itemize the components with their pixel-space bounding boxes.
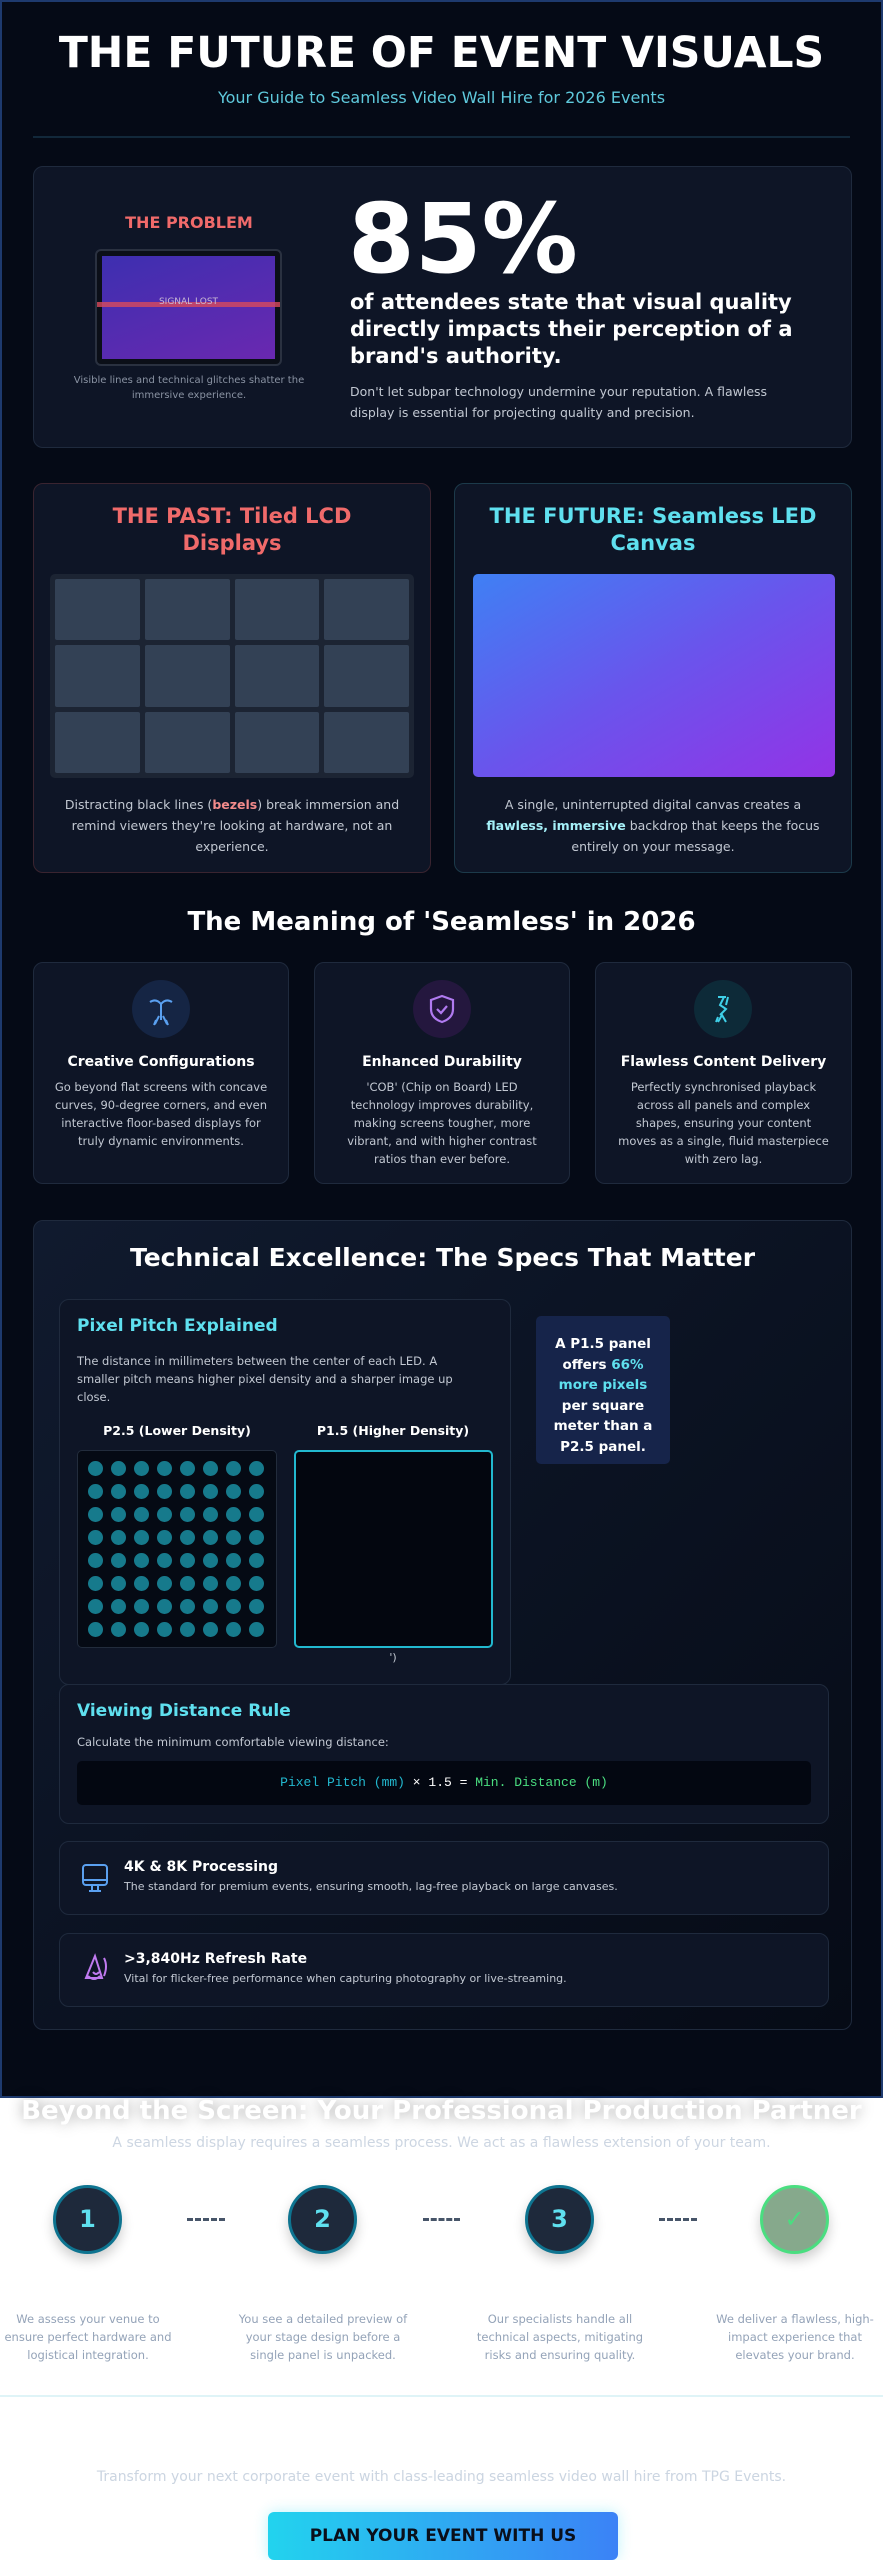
p2.5 label: P2.5 (Lower Density) xyxy=(103,1423,251,1438)
CTA button: PLAN YOUR EVENT WITH US xyxy=(310,2526,576,2546)
callout: 66%: A P1.5 panel offers 66% more pixels per square meter than a P2.5 panel. xyxy=(554,1336,652,1454)
panel: problem xyxy=(33,166,852,448)
text: 'COB' (Chip on Board) LED technology improves durability, making screens tougher, more vibrant, and with higher contrast ratios than ever before. xyxy=(347,1080,537,1166)
icon: glitched screen xyxy=(95,249,282,366)
panel: past xyxy=(33,483,431,873)
process steps: You see a detailed preview of your stage design before a single panel is unpacked. xyxy=(239,2312,407,2362)
step 3 xyxy=(525,2185,594,2254)
process steps: Our specialists handle all technical aspects, mitigating risks and ensuring quality. xyxy=(477,2312,643,2362)
heading: Pixel Pitch Explained xyxy=(77,1316,278,1336)
seamless canvas xyxy=(473,574,835,777)
p1.5 label: P1.5 (Higher Density) xyxy=(317,1423,469,1438)
subpanel: pixel pitch xyxy=(59,1299,511,1685)
step 1 xyxy=(53,2185,122,2254)
past caption: Distracting black lines (bezels) break immersion and remind viewers they're looking at hardware, not an experience. xyxy=(65,797,399,854)
formula: Pixel Pitch (mm) × 1.5 = Min. Distance (m) xyxy=(280,1775,608,1790)
future heading: THE FUTURE: Seamless LED xyxy=(490,504,816,528)
p2.5 grid xyxy=(77,1450,277,1648)
spec text: 4K & 8K Processing xyxy=(124,1859,278,1875)
text: Calculate the minimum comfortable viewing distance: xyxy=(77,1735,389,1749)
problem caption: Visible lines and technical glitches shatter the immersive experience. xyxy=(74,375,304,401)
heading: Viewing Distance Rule xyxy=(77,1701,291,1721)
icon: monitor xyxy=(82,1864,108,1892)
heading: Flawless Content Delivery xyxy=(621,1054,826,1070)
tiled LCD grid xyxy=(50,574,414,778)
meaning heading: The Meaning of 'Seamless' in 2026 xyxy=(187,907,696,937)
heading: Creative Configurations xyxy=(67,1054,255,1070)
callout: 66% xyxy=(536,1316,670,1464)
icon: shield xyxy=(413,980,471,1038)
future caption: A single, uninterrupted digital canvas creates a flawless, immersive backdrop that keeps the focus entirely on your message. xyxy=(486,797,820,854)
panel: content delivery xyxy=(595,962,852,1184)
spec: 4K 8K: The standard for premium events, ensuring smooth, lag-free playback on large canvases. xyxy=(124,1880,618,1893)
text: Perfectly synchronised playback across all panels and complex shapes, ensuring your content moves as a single, fluid masterpiece with zero lag. xyxy=(618,1080,829,1166)
panel: technical excellence xyxy=(33,1220,852,2030)
spec: refresh rate: Vital for flicker-free performance when capturing photography or live-streaming. xyxy=(124,1972,567,1985)
partner heading: Beyond the Screen: Your Professional Production Partner xyxy=(21,2096,862,2126)
title: THE FUTURE OF EVENT VISUALS xyxy=(59,29,824,78)
past heading: Displays xyxy=(182,531,282,555)
formula xyxy=(77,1761,811,1805)
problem heading: THE PROBLEM xyxy=(125,213,253,232)
future heading xyxy=(490,504,816,555)
spec: 4K 8K xyxy=(59,1841,829,1915)
tech heading: Technical Excellence: The Specs That Matter xyxy=(130,1243,755,1272)
step 1: 1 xyxy=(79,2205,96,2233)
past heading: THE PAST: Tiled LCD xyxy=(113,504,351,528)
step 2 xyxy=(288,2185,357,2254)
step 3: 3 xyxy=(551,2205,568,2233)
stat 85%: 85% xyxy=(348,183,578,295)
step texts: We assess your venue to ensure perfect hardware and logistical integration. xyxy=(4,2312,172,2362)
icon: glitched screen: SIGNAL LOST xyxy=(159,297,218,307)
icon: sync xyxy=(694,980,752,1038)
p1.5 box xyxy=(294,1450,493,1648)
step 4 check xyxy=(760,2185,829,2254)
panel: future xyxy=(454,483,852,873)
spec text: >3,840Hz Refresh Rate xyxy=(124,1951,307,1967)
icon: refresh xyxy=(84,1953,107,1980)
subtitle: Your Guide to Seamless Video Wall Hire for 2026 Events xyxy=(218,88,665,107)
text: The distance in millimeters between the center of each LED. A smaller pitch means higher pixel density and a sharper image up close. xyxy=(77,1354,453,1404)
partner subtitle: A seamless display requires a seamless process. We act as a flawless extension of your team. xyxy=(112,2135,771,2151)
future heading: Canvas xyxy=(611,531,695,555)
stat description: of attendees state that visual quality directly impacts their perception of a brand's authority. xyxy=(350,290,793,368)
spec: refresh rate xyxy=(59,1933,829,2007)
panel: creative configurations xyxy=(33,962,289,1184)
closing text: Transform your next corporate event with class-leading seamless video wall hire from TPG Events. xyxy=(97,2469,786,2485)
subpanel: pixel pitch: ') xyxy=(389,1651,397,1664)
past heading xyxy=(112,504,351,555)
heading: Enhanced Durability xyxy=(362,1054,522,1070)
step 2: 2 xyxy=(314,2205,331,2233)
subpanel: viewing distance xyxy=(59,1684,829,1824)
body text: Don't let subpar technology undermine your reputation. A flawless display is essential for projecting quality and precision. xyxy=(350,384,767,420)
text: Go beyond flat screens with concave curves, 90-degree corners, and even interactive floor-based displays for truly dynamic environments. xyxy=(55,1080,267,1148)
CTA button xyxy=(268,2512,618,2560)
process steps xyxy=(4,2185,874,2362)
process steps: We deliver a flawless, high-impact experience that elevates your brand. xyxy=(716,2312,874,2362)
icon: curves xyxy=(132,980,190,1038)
panel: durability xyxy=(314,962,570,1184)
step 4 check: ✓ xyxy=(784,2205,805,2233)
